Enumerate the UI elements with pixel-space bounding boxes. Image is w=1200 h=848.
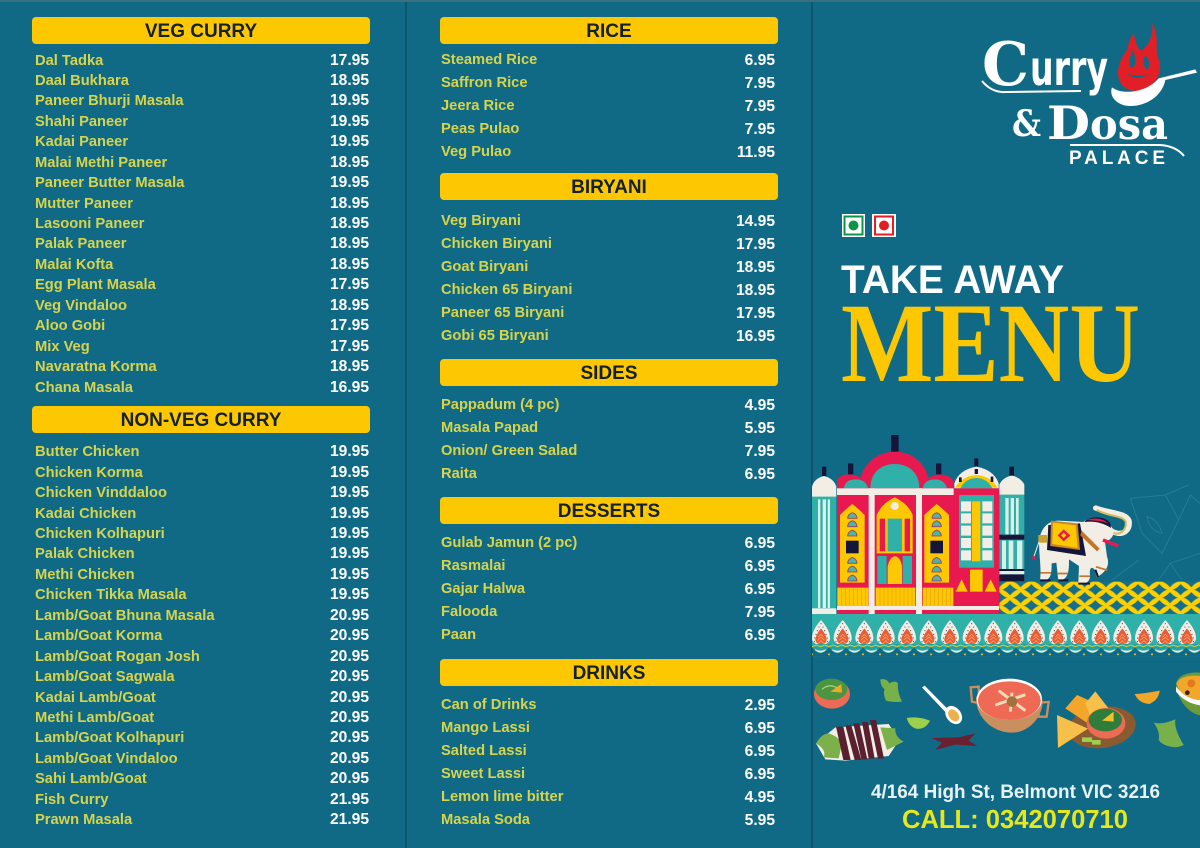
list: non-veg curry items: 19.95 [330,566,369,583]
list: drinks items: Salted Lassi [441,743,527,759]
list: biryani items: 14.95 [736,213,775,230]
list: non-veg curry items: 19.95 [330,464,369,481]
heading: drinks: DRINKS [573,663,645,684]
heading: drinks [440,659,778,686]
palace [812,435,1024,614]
list: desserts items: Paan [441,627,476,643]
food: curry bowl [1176,673,1200,715]
list: drinks items: Lemon lime bitter [441,789,563,805]
list: non-veg curry items: 20.95 [330,750,369,767]
list: rice items: 6.95 [745,52,775,69]
list: veg curry items: 17.95 [330,317,369,334]
list: non-veg curry items: Chicken Korma [35,465,143,481]
logo: urry [1030,41,1108,97]
list: non-veg curry items: 20.95 [330,627,369,644]
heading: biryani: BIRYANI [571,177,647,198]
list: veg curry items: 19.95 [330,92,369,109]
heading: veg curry: VEG CURRY [145,21,257,42]
list: non-veg curry items: Lamb/Goat Sagwala [35,669,175,685]
food: orange slice [1135,691,1160,704]
list: sides items: 5.95 [745,420,775,437]
list: veg curry items: 17.95 [330,52,369,68]
list: sides items: Onion/ Green Salad [441,443,577,459]
list: biryani items: 17.95 [736,305,775,322]
heading: sides: SIDES [580,363,638,384]
list: rice items: 7.95 [745,98,775,115]
list: desserts items: Gajar Halwa [441,581,525,597]
illustration: food [814,673,1200,761]
list: veg curry items: 18.95 [330,215,369,232]
heading: sides [440,359,778,386]
list: drinks items: 6.95 [745,743,775,760]
list: drinks items: 6.95 [745,766,775,783]
list: desserts items: Gulab Jamun (2 pc) [441,535,577,551]
list: non-veg curry items: Methi Chicken [35,567,135,583]
list: sides items [441,397,775,483]
list: veg curry items: Malai Kofta [35,257,113,273]
list: veg curry items: 16.95 [330,378,369,396]
list: drinks items: Mango Lassi [441,720,530,736]
list: veg curry items: 18.95 [330,358,369,375]
list: non-veg curry items: 19.95 [330,484,369,501]
food: curry pot [971,679,1049,733]
icon: non-veg mark [872,214,896,237]
list: non-veg curry items: 21.95 [330,811,369,828]
list: non-veg curry items: Fish Curry [35,792,108,808]
address: 4/164 High St, Belmont VIC 3216 [871,781,1160,803]
list: veg curry items: 18.95 [330,297,369,314]
title: take away: TAKE AWAY [841,258,1064,302]
list: non-veg curry items: Sahi Lamb/Goat [35,771,147,787]
list: drinks items: 4.95 [745,789,775,806]
list: non-veg curry items: 20.95 [330,709,369,726]
title: menu: MENU [841,281,1140,406]
list: veg curry items: Veg Vindaloo [35,298,127,314]
list: rice items: 7.95 [745,121,775,138]
list: non-veg curry items: 19.95 [330,586,369,603]
list: non-veg curry items: Methi Lamb/Goat [35,710,154,726]
list: sides items: 4.95 [745,397,775,414]
list: veg curry items: Shahi Paneer [35,114,128,130]
list: non-veg curry items: Lamb/Goat Vindaloo [35,751,178,767]
list: drinks items: Masala Soda [441,812,530,828]
list: non-veg curry items: Prawn Masala [35,812,132,828]
logo: dosa word: Dosa [1047,96,1168,150]
list: veg curry items: Paneer Bhurji Masala [35,93,184,109]
food: spoon [922,686,966,727]
heading: rice: RICE [586,21,632,42]
list: non-veg curry items: Lamb/Goat Korma [35,628,162,644]
food: chillies [931,733,977,750]
list: non-veg curry items: 19.95 [330,443,369,460]
logo: curry word: C [982,30,1029,100]
list: desserts items: 7.95 [745,604,775,621]
list: veg curry items: Navaratna Korma [35,359,157,375]
food: kebab plate [816,720,904,761]
heading: non-veg curry: NON-VEG CURRY [121,410,281,431]
list: sides items: Masala Papad [441,420,538,436]
list: non-veg curry items: Lamb/Goat Rogan Josh [35,649,200,665]
list: drinks items: Can of Drinks [441,697,536,713]
list: drinks items [441,697,775,829]
list: veg curry items: 19.95 [330,133,369,150]
list: desserts items: 6.95 [745,535,775,552]
list: non-veg curry items: 20.95 [330,770,369,787]
list: veg curry items: Aloo Gobi [35,318,105,334]
logo [982,23,1197,169]
list: non-veg curry items: Lamb/Goat Bhuna Masala [35,608,215,624]
heading: desserts: DESSERTS [558,501,660,522]
logo: palace word: PALACE [1069,148,1165,169]
list: veg curry items: Paneer Butter Masala [35,175,184,191]
list: biryani items [441,213,775,345]
list: drinks items: 5.95 [745,812,775,829]
list: veg curry items: Malai Methi Paneer [35,155,167,171]
panel: curries column [32,17,370,828]
list: biryani items: Gobi 65 Biryani [441,328,549,344]
logo: flame [1118,23,1160,91]
heading: veg curry [32,17,370,44]
food: leaf [1154,719,1184,747]
list: desserts items: Rasmalai [441,558,506,574]
list: non-veg curry items: Chicken Kolhapuri [35,526,165,542]
list: non-veg curry items: 20.95 [330,729,369,746]
list: rice items: 11.95 [737,144,775,161]
list: non-veg curry items: 19.95 [330,505,369,522]
list: sides items: 7.95 [745,443,775,460]
list: veg curry items [35,52,369,396]
list: veg curry items: Dal Tadka [35,52,103,68]
list: desserts items: 6.95 [745,558,775,575]
list: biryani items: 18.95 [736,282,775,299]
list: rice items: Saffron Rice [441,75,528,91]
lattice band [999,582,1200,614]
food: chutney bowl [814,679,850,709]
list: biryani items: 17.95 [736,236,775,253]
list: biryani items: Veg Biryani [441,213,521,229]
icon: veg mark [842,214,865,237]
list: veg curry items: Mutter Paneer [35,196,133,212]
food: dosa and chutney plate [1057,691,1139,753]
list: rice items: Steamed Rice [441,52,537,68]
list: non-veg curry items: Kadai Lamb/Goat [35,690,156,706]
list: non-veg curry items: 20.95 [330,668,369,685]
ornamental border [812,614,1200,657]
list: biryani items: Chicken 65 Biryani [441,282,572,298]
list: veg curry items: Palak Paneer [35,236,126,252]
list: non-veg curry items: Palak Chicken [35,546,135,562]
list: biryani items: Chicken Biryani [441,236,552,252]
list: non-veg curry items: Chicken Vinddaloo [35,485,167,501]
list: sides items: 6.95 [745,466,775,483]
list: rice items [441,52,775,161]
list: non-veg curry items: Chicken Tikka Masala [35,587,187,603]
list: veg curry items: 18.95 [330,72,369,89]
list: veg curry items: 18.95 [330,154,369,171]
logo: pan [1111,69,1197,106]
list: desserts items: Falooda [441,604,497,620]
list: veg curry items: 18.95 [330,235,369,252]
list: veg curry items: 19.95 [330,174,369,191]
list: rice items: Jeera Rice [441,98,514,114]
list: biryani items: Paneer 65 Biryani [441,305,564,321]
list: biryani items: Goat Biryani [441,259,528,275]
list: sides items: Raita [441,466,477,482]
list: non-veg curry items: Lamb/Goat Kolhapuri [35,730,184,746]
illustration: elephant [1032,508,1129,585]
list: veg curry items: Chana Masala [35,380,133,396]
heading: desserts [440,497,778,524]
list: biryani items: 18.95 [736,259,775,276]
list: veg curry items: 17.95 [330,276,369,293]
list: non-veg curry items: 20.95 [330,689,369,706]
list: non-veg curry items: Kadai Chicken [35,506,136,522]
list: veg curry items: 17.95 [330,338,369,355]
food: lime [907,717,930,729]
list: drinks items: 2.95 [745,697,775,714]
heading: rice [440,17,778,44]
list: veg curry items: Kadai Paneer [35,134,128,150]
list: veg curry items: Daal Bukhara [35,73,129,89]
list: non-veg curry items [35,443,369,828]
food: leaf [880,679,902,702]
list: veg curry items: 19.95 [330,113,369,130]
illustration: palace and border [812,435,1200,657]
list: drinks items: 6.95 [745,720,775,737]
list: desserts items: 6.95 [745,627,775,644]
list: rice items: 7.95 [745,75,775,92]
list: drinks items: Sweet Lassi [441,766,525,782]
list: non-veg curry items: 20.95 [330,648,369,665]
list: veg curry items: 18.95 [330,256,369,273]
list: veg curry items: Mix Veg [35,339,90,355]
heading: non-veg curry [32,406,370,433]
heading: biryani [440,173,778,200]
list: biryani items: 16.95 [736,328,775,345]
list: non-veg curry items: 19.95 [330,525,369,542]
list: veg curry items: Egg Plant Masala [35,277,156,293]
list: non-veg curry items: 19.95 [330,545,369,562]
list: non-veg curry items: 21.95 [330,791,369,808]
list: desserts items [441,535,775,644]
list: rice items: Peas Pulao [441,121,519,137]
phone number: CALL: 0342070710 [902,804,1128,834]
list: non-veg curry items: Butter Chicken [35,444,139,460]
list: sides items: Pappadum (4 pc) [441,397,559,413]
logo: and sign: & [1012,103,1041,145]
list: veg curry items: 18.95 [330,195,369,212]
list: rice items: Veg Pulao [441,144,511,160]
list: desserts items: 6.95 [745,581,775,598]
list: non-veg curry items: 20.95 [330,607,369,624]
list: veg curry items: Lasooni Paneer [35,216,144,232]
panel: rice, biryani, sides, desserts, drinks column [440,17,778,829]
